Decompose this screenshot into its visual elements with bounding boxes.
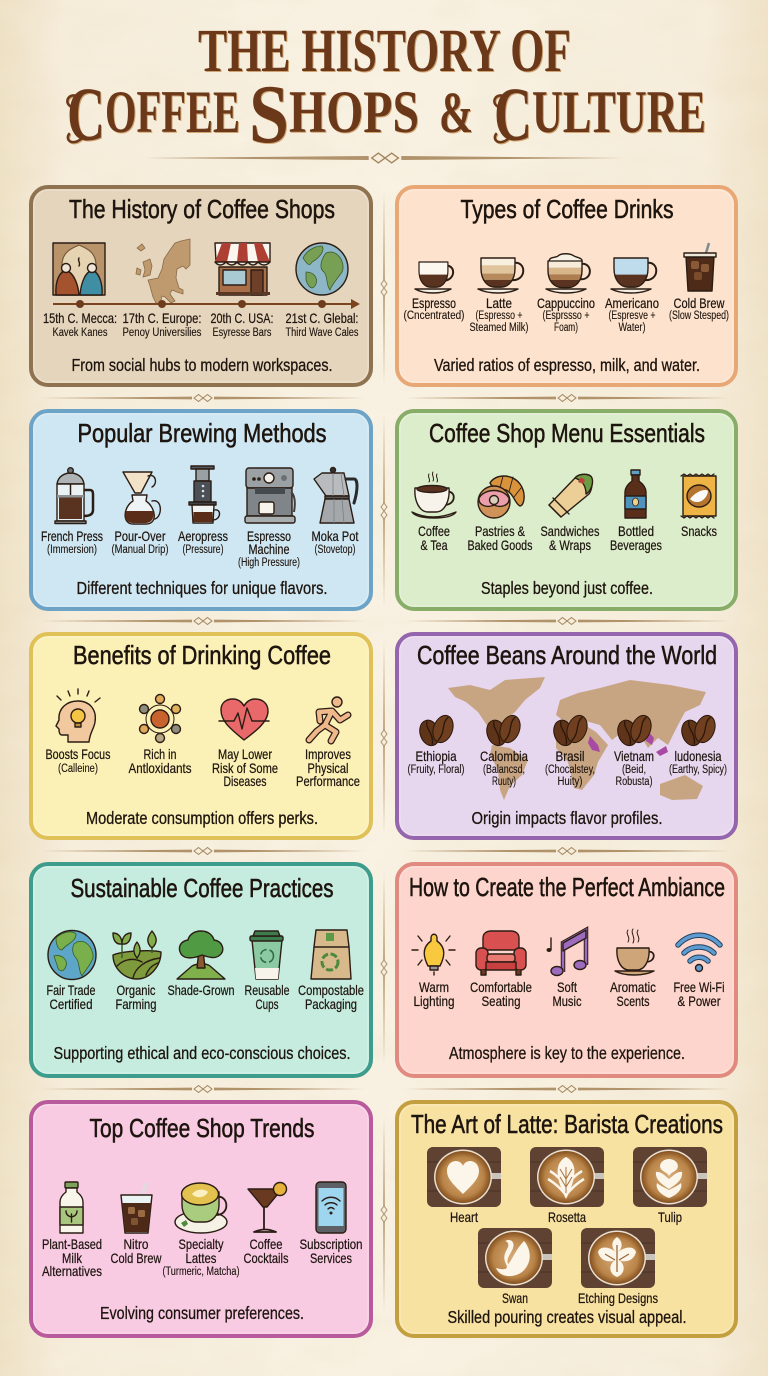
label: compostable packaging: Compostable [298, 982, 364, 998]
caption: Different techniques for unique flavors. [76, 578, 328, 598]
label: 15th century: 15th C. Mecca: [43, 310, 117, 326]
label: warm lighting [414, 979, 454, 1009]
icon: heart with pulse [219, 699, 269, 740]
icon: armchair [476, 931, 526, 975]
title: C [67, 73, 105, 157]
label: compostable packaging: Packaging [305, 996, 357, 1012]
label: antioxidants: Antloxidants [128, 760, 192, 776]
panel: top coffee shop trends [31, 1102, 371, 1336]
label: moka pot [312, 528, 359, 556]
label: subscription services: Services [310, 1250, 352, 1266]
label: plant-based milk: Plant-Based [42, 1236, 102, 1252]
label: specialty lattes: (Turmeric, Matcha) [162, 1266, 240, 1278]
label: soft music: Soft [557, 979, 577, 995]
label: indonesia [669, 748, 727, 776]
heading: Coffee Shop Menu Essentials [429, 418, 705, 448]
label: organic farming: Farming [116, 996, 156, 1012]
icon: head with lightbulb [56, 689, 100, 742]
label: ethiopia: Ethiopia [416, 748, 457, 764]
heading: Types of Coffee Drinks [460, 194, 674, 224]
label: boosts focus: (Calleine) [58, 763, 98, 775]
icon: pastries [478, 476, 524, 518]
label: physical performance: Performance [296, 773, 360, 789]
label: plant-based milk [42, 1236, 102, 1279]
label: swan: Swan [502, 1290, 528, 1306]
icon: antioxidants molecule [140, 694, 180, 742]
world map [448, 677, 706, 800]
label: cold brew: Cold Brew [674, 295, 725, 311]
label: boosts focus [46, 746, 110, 775]
caption: Supporting ethical and eco-conscious choices. [54, 1043, 350, 1063]
label: espresso: Espresso [412, 295, 456, 311]
label: lower disease risk: May Lower [218, 746, 272, 762]
label: 17th century: 17th C. Europe: [122, 310, 202, 326]
icon: subscription phone [316, 1182, 346, 1233]
title: HOPS [289, 79, 419, 145]
label: espresso [404, 295, 465, 322]
label: cappuccino: Foam) [554, 322, 578, 334]
caption: Staples beyond just coffee. [481, 578, 653, 598]
label: antioxidants: Rich in [144, 746, 176, 762]
label: coffee cocktails [244, 1236, 288, 1266]
label: physical performance: Improves [305, 746, 351, 762]
label: specialty lattes [162, 1236, 240, 1278]
icon: runner [309, 697, 348, 741]
label: warm lighting: Lighting [414, 993, 454, 1009]
label: pastries: Baked Goods [468, 537, 532, 553]
icon: colombia beans [484, 713, 524, 748]
label: lower disease risk [212, 746, 278, 789]
label: sandwiches [540, 523, 600, 553]
label: sandwiches: Sandwiches [540, 523, 600, 539]
label: 17th century [122, 310, 202, 339]
label: coffee cocktails: Cocktails [244, 1250, 288, 1266]
column and row ornaments [41, 191, 729, 1311]
label: brazil [545, 748, 595, 788]
label: organic farming [116, 982, 156, 1012]
label: latte: Steamed Milk) [470, 322, 529, 334]
latte art: rosetta [530, 1147, 604, 1207]
label: 15th century: Kavek Kanes [52, 327, 108, 339]
panel: coffee beans around the world [397, 634, 736, 838]
label: fair trade: Fair Trade [46, 982, 96, 998]
label: ethiopia: (Fruity, Floral) [408, 764, 465, 776]
label: pastries: Pastries & [475, 523, 526, 539]
label: latte [470, 295, 529, 334]
title: THE HISTORY OF [198, 18, 571, 85]
label: lower disease risk: Diseases [224, 773, 266, 789]
label: reusable cups: Reusable [244, 982, 290, 998]
label: etching designs: Etching Designs [578, 1290, 658, 1306]
title: C [494, 73, 532, 157]
label: ethiopia [408, 748, 465, 776]
icon: plant-based milk [60, 1182, 83, 1233]
label: americano: Americano [605, 295, 659, 311]
heading: Benefits of Drinking Coffee [73, 640, 331, 670]
latte art: etching designs [581, 1228, 655, 1288]
label: nitro cold brew [110, 1236, 162, 1266]
label: aeropress [178, 528, 228, 556]
label: nitro cold brew: Cold Brew [110, 1250, 162, 1266]
label: aeropress: (Pressure) [182, 544, 224, 556]
label: french press [41, 528, 103, 556]
label: 21st century [286, 310, 359, 339]
label: aeropress: Aeropress [178, 528, 228, 544]
heading: Top Coffee Shop Trends [90, 1113, 314, 1143]
label: cold brew: (Slow Stesped) [669, 310, 729, 322]
label: pastries [468, 523, 532, 553]
icon: reusable cup [250, 931, 283, 979]
label: shade-grown: Shade-Grown [168, 982, 234, 998]
label: plant-based milk: Milk [62, 1250, 83, 1266]
panel: popular brewing methods [31, 411, 371, 609]
icon: organic farming sprouts [113, 931, 161, 979]
caption: Atmosphere is key to the experience. [449, 1043, 685, 1063]
caption: Moderate consumption offers perks. [86, 808, 318, 828]
label: coffee and tea: & Tea [420, 537, 448, 553]
label: pour-over: (Manual Drip) [112, 544, 169, 556]
icon: music notes [546, 930, 586, 976]
icon: aromatic scents [615, 929, 654, 975]
icon: cold brew [684, 243, 716, 291]
label: french press: (Immersion) [47, 544, 97, 556]
label: brazil: Brasil [556, 748, 584, 764]
caption: Skilled pouring creates visual appeal. [448, 1307, 686, 1327]
label: fair trade: Certified [50, 996, 92, 1012]
label: specialty lattes: Lattes [186, 1250, 216, 1266]
latte art: heart [427, 1147, 501, 1207]
label: subscription services [300, 1236, 362, 1266]
timeline arrow [53, 299, 360, 309]
label: pour-over [112, 528, 169, 556]
icon: fair trade globe [48, 930, 96, 980]
label: reusable cups: Cups [256, 996, 278, 1012]
icon: latte cup [478, 258, 523, 293]
label: americano: Water) [618, 322, 646, 334]
panel: benefits of drinking coffee [31, 634, 371, 838]
icon: wi-fi signal [678, 935, 720, 972]
label: 20th century: Esyresse Bars [212, 327, 272, 339]
icon: specialty matcha latte [175, 1183, 227, 1233]
label: bottled beverages [610, 523, 662, 553]
label: subscription services: Subscription [300, 1236, 362, 1252]
label: pour-over: Pour-Over [114, 528, 166, 544]
title: & [439, 80, 473, 145]
label: vietnam: Vietnam [614, 748, 654, 764]
label: soft music: Music [552, 993, 582, 1009]
icon: coffee and tea [412, 472, 456, 518]
title ornament divider [145, 153, 625, 163]
label: espresso machine: Machine [248, 541, 290, 557]
icon: coffee cocktail [248, 1182, 286, 1232]
label: reusable cups [244, 982, 290, 1012]
label: 17th century: Penoy Universilies [122, 327, 202, 339]
label: comfortable seating: Comfortable [470, 979, 532, 995]
icon: map of europe [136, 239, 190, 304]
icon: moka pot [314, 468, 357, 523]
icon: bottled beverage [625, 470, 646, 518]
label: latte: (Espresso + [476, 310, 523, 322]
caption: Evolving consumer preferences. [100, 1303, 304, 1323]
caption: Varied ratios of espresso, milk, and water. [434, 355, 700, 375]
icon: american coffee shop [215, 243, 270, 295]
title [67, 18, 706, 161]
label: aromatic scents: Aromatic [610, 979, 656, 995]
label: espresso machine: Espresso [247, 528, 291, 544]
label: cappuccino: Cappuccino [537, 295, 595, 311]
icon: warm lighting bulb [412, 934, 455, 975]
label: warm lighting: Warm [419, 979, 449, 995]
label: specialty lattes: Specialty [178, 1236, 224, 1252]
heading: Popular Brewing Methods [78, 418, 326, 448]
heading: The History of Coffee Shops [69, 194, 335, 224]
label: aromatic scents: Scents [616, 993, 650, 1009]
label: indonesia: (Earthy, Spicy) [669, 764, 727, 776]
label: physical performance: Physical [308, 760, 348, 776]
label: 20th century [210, 310, 274, 339]
label: espresso machine: (High Pressure) [238, 557, 300, 569]
label: antioxidants [128, 746, 192, 776]
icon: vietnam beans [615, 713, 655, 748]
label: heart: Heart [450, 1209, 478, 1225]
label: boosts focus: Boosts Focus [46, 746, 110, 762]
label: tulip: Tulip [658, 1209, 682, 1225]
icon: nitro cold brew [121, 1182, 152, 1233]
label: cappuccino [537, 295, 595, 334]
label: bottled beverages: Beverages [610, 537, 662, 553]
panel: coffee shop menu essentials [397, 411, 736, 609]
panel: the history of coffee shops [31, 187, 371, 385]
label: coffee and tea [418, 523, 450, 553]
label: fair trade [46, 982, 96, 1012]
label: plant-based milk: Alternatives [42, 1263, 102, 1279]
title: S [249, 68, 289, 161]
label: 21st century: 21st C. Glebal: [286, 310, 358, 326]
label: 20th century: 20th C. USA: [210, 310, 274, 326]
icon: espresso cup [415, 262, 453, 293]
label: brazil: Huity) [558, 776, 583, 788]
label: compostable packaging [298, 982, 364, 1012]
icon: wrap sandwich [549, 474, 593, 517]
label: vietnam: Robusta) [616, 776, 653, 788]
label: colombia [480, 748, 528, 788]
label: espresso machine [238, 528, 300, 569]
label: colombia: (Balancsd, [483, 764, 525, 776]
title: OFFEE [105, 79, 240, 145]
label: nitro cold brew: Nitro [124, 1236, 149, 1252]
icon: globe [296, 243, 348, 295]
label: comfortable seating [470, 979, 532, 1009]
label: moka pot: Moka Pot [312, 528, 359, 544]
label: comfortable seating: Seating [482, 993, 520, 1009]
label: free wi-fi [674, 979, 724, 1009]
icon: americano cup [611, 258, 656, 293]
panel: the art of latte [397, 1102, 736, 1336]
label: cold brew [669, 295, 729, 322]
label: vietnam [614, 748, 654, 788]
heading: Sustainable Coffee Practices [70, 873, 334, 903]
latte art: tulip [633, 1147, 707, 1207]
label: 21st century: Third Wave Cales [286, 327, 359, 339]
label: bottled beverages: Bottled [618, 523, 654, 539]
label: physical performance [296, 746, 360, 789]
label: organic farming: Organic [116, 982, 156, 998]
label: lower disease risk: Risk of Some [212, 760, 278, 776]
label: soft music [552, 979, 582, 1009]
label: snacks: Snacks [681, 523, 717, 539]
icon: espresso machine [245, 468, 295, 523]
icon: mecca coffee house [53, 243, 105, 295]
label: coffee and tea: Coffee [418, 523, 450, 539]
label: vietnam: (Beid, [622, 764, 646, 776]
label: french press: French Press [41, 528, 103, 544]
panel: types of coffee drinks [397, 187, 736, 385]
label: colombia: Calombia [480, 748, 528, 764]
label: free wi-fi: & Power [678, 993, 721, 1009]
label: americano: (Espresve + [608, 310, 656, 322]
label: brazil: (Chocalstey, [545, 764, 595, 776]
icon: french press [55, 468, 93, 524]
icon: indonesia beans [679, 713, 719, 748]
caption: From social hubs to modern workspaces. [72, 355, 332, 375]
label: moka pot: (Stovetop) [314, 544, 356, 556]
panel: how to create the perfect ambiance [397, 864, 736, 1076]
label: rosetta: Rosetta [548, 1209, 586, 1225]
label: sandwiches: & Wraps [549, 537, 591, 553]
label: colombia: Ruuty) [492, 776, 516, 788]
icon: aeropress [189, 466, 220, 523]
icon: brazil beans [551, 713, 591, 748]
label: americano [605, 295, 659, 334]
icon: cappuccino cup [546, 254, 590, 293]
label: coffee cocktails: Coffee [250, 1236, 283, 1252]
label: free wi-fi: Free Wi-Fi [674, 979, 724, 995]
icon: shade tree [177, 931, 225, 979]
panel: sustainable coffee practices [31, 864, 371, 1076]
label: latte: Latte [486, 295, 512, 311]
latte art: swan [478, 1228, 552, 1288]
label: cappuccino: (Esprssso + [542, 310, 590, 322]
caption: Origin impacts flavor profiles. [472, 808, 662, 828]
icon: snack bag [681, 474, 716, 518]
icon: ethiopia beans [417, 713, 457, 748]
label: aromatic scents [610, 979, 656, 1009]
label: indonesia: ludonesia [674, 748, 722, 764]
icon: compostable bag [311, 930, 351, 979]
label: 15th century [43, 310, 117, 339]
icon: pour-over [123, 472, 160, 524]
label: espresso: (Cncentrated) [404, 310, 465, 322]
